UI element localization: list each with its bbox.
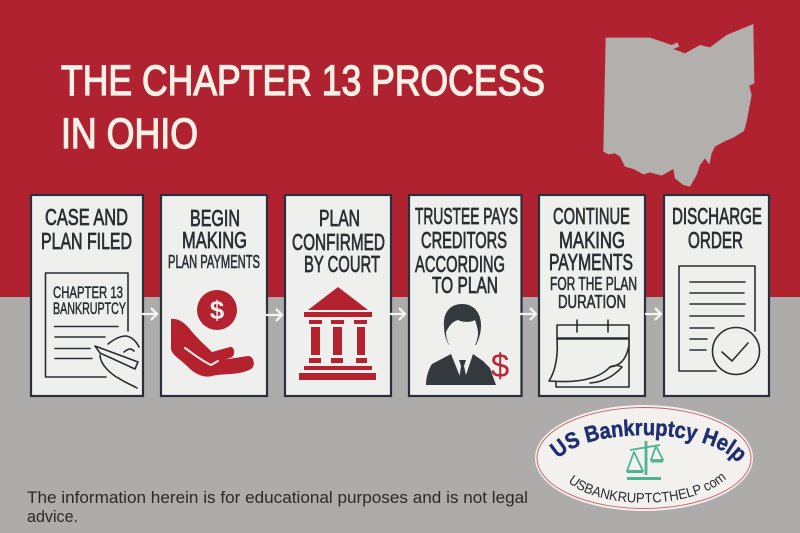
heading: begin making plan payments [168,205,260,272]
heading: continue making payments for the plan duration: FOR THE PLAN [550,274,637,294]
title: IN OHIO [61,110,198,158]
icon: Ohio state map [603,24,754,187]
arrow 2 [265,309,282,321]
icon: calendar with curled page [549,320,629,387]
disclaimer text: The information herein is for educational purposes and is not legal [27,489,528,507]
heading: plan confirmed by court: CONFIRMED [292,229,385,255]
icon: trustee with dollar sign [426,304,509,385]
panel: plan confirmed by court [285,195,391,396]
heading: begin making plan payments: BEGIN [190,205,240,231]
heading: case and plan filed: CASE AND [45,204,128,230]
icon: hand receiving dollar coin [171,290,254,377]
icon: document with check mark [679,266,760,374]
icon: scales of justice [627,441,663,478]
heading: trustee pays creditors according to plan: TRUSTEE PAYS [415,203,518,229]
heading: discharge order [672,203,762,253]
heading: case and plan filed [41,204,132,254]
panel: continue making payments [539,195,645,396]
icon: courthouse [299,287,376,380]
heading: trustee pays creditors according to plan: CREDITORS [421,227,507,253]
heading: plan confirmed by court: PLAN [319,205,360,231]
heading: trustee pays creditors according to plan [415,203,518,298]
heading: plan confirmed by court [292,205,385,277]
heading: continue making payments for the plan duration: CONTINUE [553,203,630,229]
title [61,57,545,158]
panel: begin making plan payments [161,195,267,396]
icon: trustee with dollar sign: $ [491,347,509,384]
logo: US Bankruptcy Help [535,405,753,511]
panel: discharge order [664,195,769,396]
arrow 5 [645,308,661,320]
heading: trustee pays creditors according to plan: ACCORDING [415,251,505,277]
gray lower background [0,297,800,533]
icon: bankruptcy document and signing hand: CHAPTER 13 [53,283,123,302]
heading: case and plan filed: PLAN FILED [41,228,132,254]
icon: hand receiving dollar coin: $ [210,295,225,325]
heading: continue making payments for the plan duration: DURATION [558,292,626,312]
panel: case and plan filed [31,195,143,396]
disclaimer text [27,489,528,526]
heading: continue making payments for the plan duration: MAKING [559,227,625,253]
heading: discharge order: ORDER [688,227,743,253]
logo web address: USBANKRUPTCTHELP com [570,474,726,503]
heading: continue making payments for the plan duration [549,203,637,312]
red header background [0,0,800,297]
arrow 4 [520,308,536,320]
heading: plan confirmed by court: BY COURT [304,251,380,277]
icon: bankruptcy document and signing hand: BANKRUPTCY [53,299,126,318]
heading: trustee pays creditors according to plan: TO PLAN [432,272,498,298]
heading: continue making payments for the plan duration: PAYMENTS [549,249,633,275]
title: THE CHAPTER 13 PROCESS [61,57,545,105]
panel: trustee pays creditors [409,195,522,396]
icon: bankruptcy document and signing hand [46,273,139,388]
logo name: US Bankruptcy Help [549,419,744,462]
disclaimer text: advice. [27,508,78,526]
heading: begin making plan payments: PLAN PAYMENTS [168,252,260,272]
arrow 3 [389,308,405,320]
arrow 1 [142,308,157,320]
heading: begin making plan payments: MAKING [182,227,247,253]
